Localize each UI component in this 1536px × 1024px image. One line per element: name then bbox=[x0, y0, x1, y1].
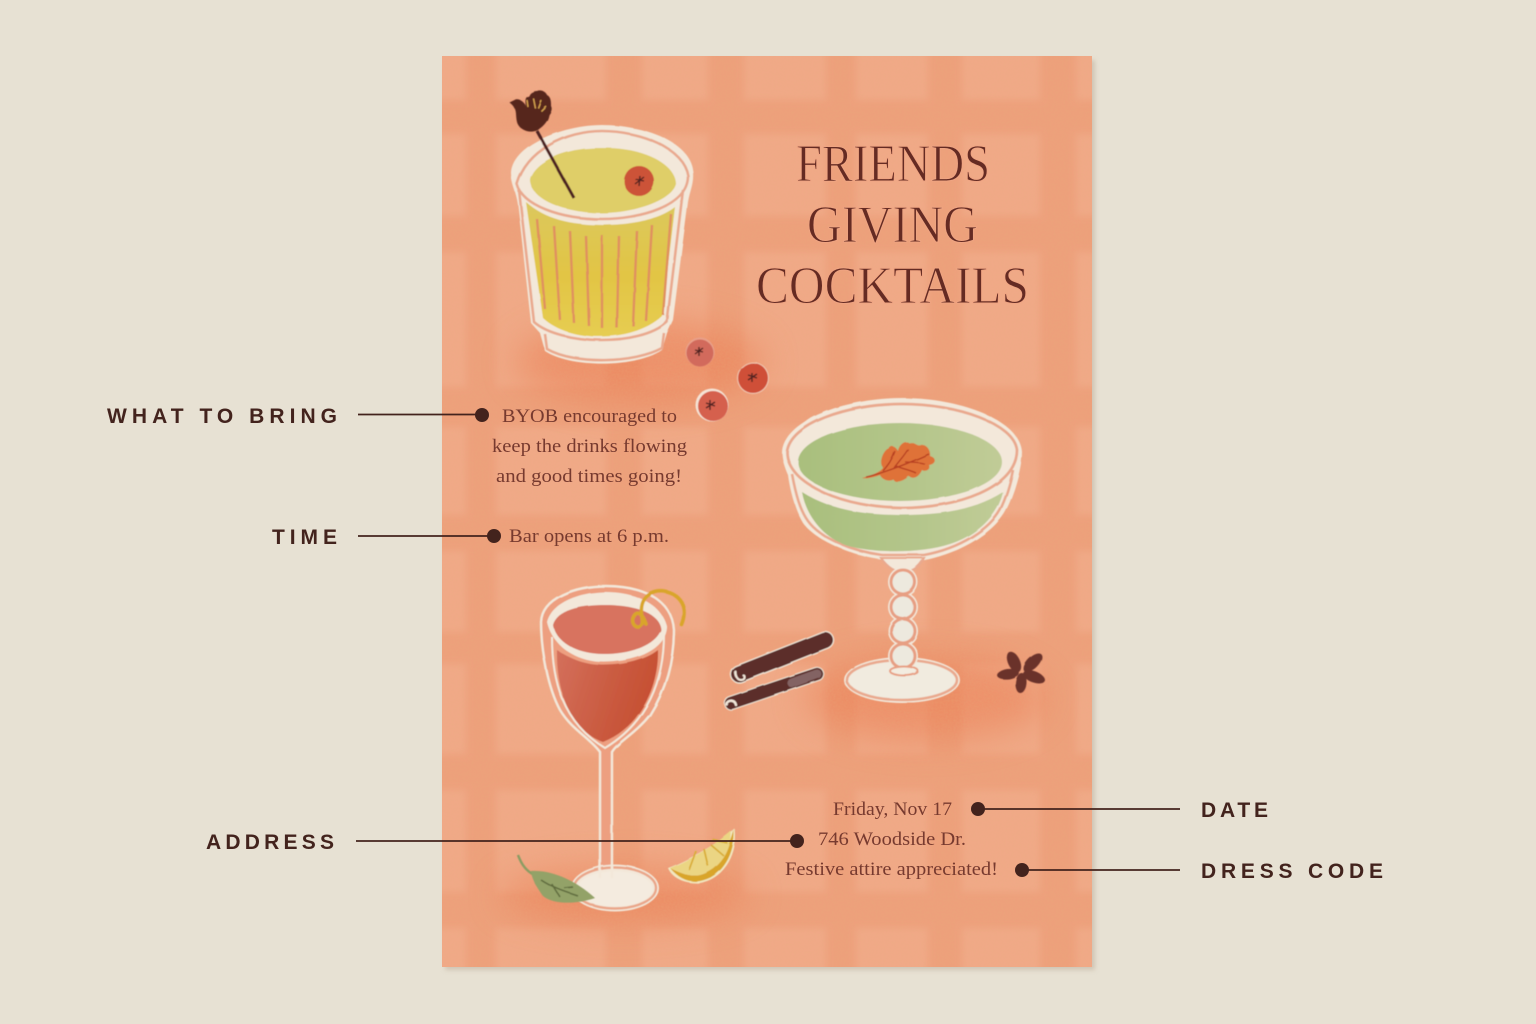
icon: coupe glass with green drink bbox=[782, 398, 1022, 703]
icon: berry in drink bbox=[624, 166, 654, 196]
title bbox=[756, 135, 1029, 315]
callout: time: TIME bbox=[272, 526, 337, 549]
icon: star anise bbox=[996, 649, 1047, 693]
text: what to bring: keep the drinks flowing bbox=[492, 436, 688, 457]
text: what to bring: BYOB encouraged to bbox=[502, 406, 677, 427]
callout: what to bring: WHAT TO BRING bbox=[107, 405, 337, 428]
icon: cocktail picks and rocks glass with yellow drink bbox=[510, 90, 693, 364]
title: FRIENDS bbox=[796, 135, 990, 193]
text: what to bring bbox=[492, 406, 688, 487]
icon: three loose berries bbox=[686, 338, 769, 422]
text: time: Bar opens at 6 p.m. bbox=[509, 526, 669, 547]
icon: lemon twist bbox=[633, 591, 685, 627]
callout: time bbox=[272, 526, 501, 549]
callout: date: DATE bbox=[1201, 799, 1268, 822]
icon: beaded stem and foot bbox=[844, 558, 960, 703]
icon: basil leaf bbox=[518, 855, 595, 903]
title: COCKTAILS bbox=[756, 257, 1029, 315]
text: event details: Friday, Nov 17 bbox=[833, 799, 952, 820]
callout: address: ADDRESS bbox=[206, 831, 334, 854]
callout: address bbox=[206, 831, 804, 854]
icon: wine glass with red drink bbox=[541, 586, 685, 912]
callout: dress code bbox=[1015, 860, 1383, 883]
icon: turkey cocktail pick bbox=[510, 90, 574, 198]
text: event details: Festive attire appreciated! bbox=[785, 859, 998, 880]
callout: date bbox=[971, 799, 1268, 822]
text: what to bring: and good times going! bbox=[496, 466, 682, 487]
icon: orange leaf garnish bbox=[862, 442, 935, 482]
invitation card bbox=[430, 40, 1110, 980]
callout: dress code: DRESS CODE bbox=[1201, 860, 1383, 883]
icon: cinnamon sticks bbox=[726, 640, 825, 705]
callout: what to bring bbox=[107, 405, 489, 428]
icon: lemon wedge bbox=[668, 829, 735, 883]
title: GIVING bbox=[807, 196, 978, 254]
text: event details: 746 Woodside Dr. bbox=[818, 829, 966, 850]
text: event details bbox=[785, 799, 998, 880]
